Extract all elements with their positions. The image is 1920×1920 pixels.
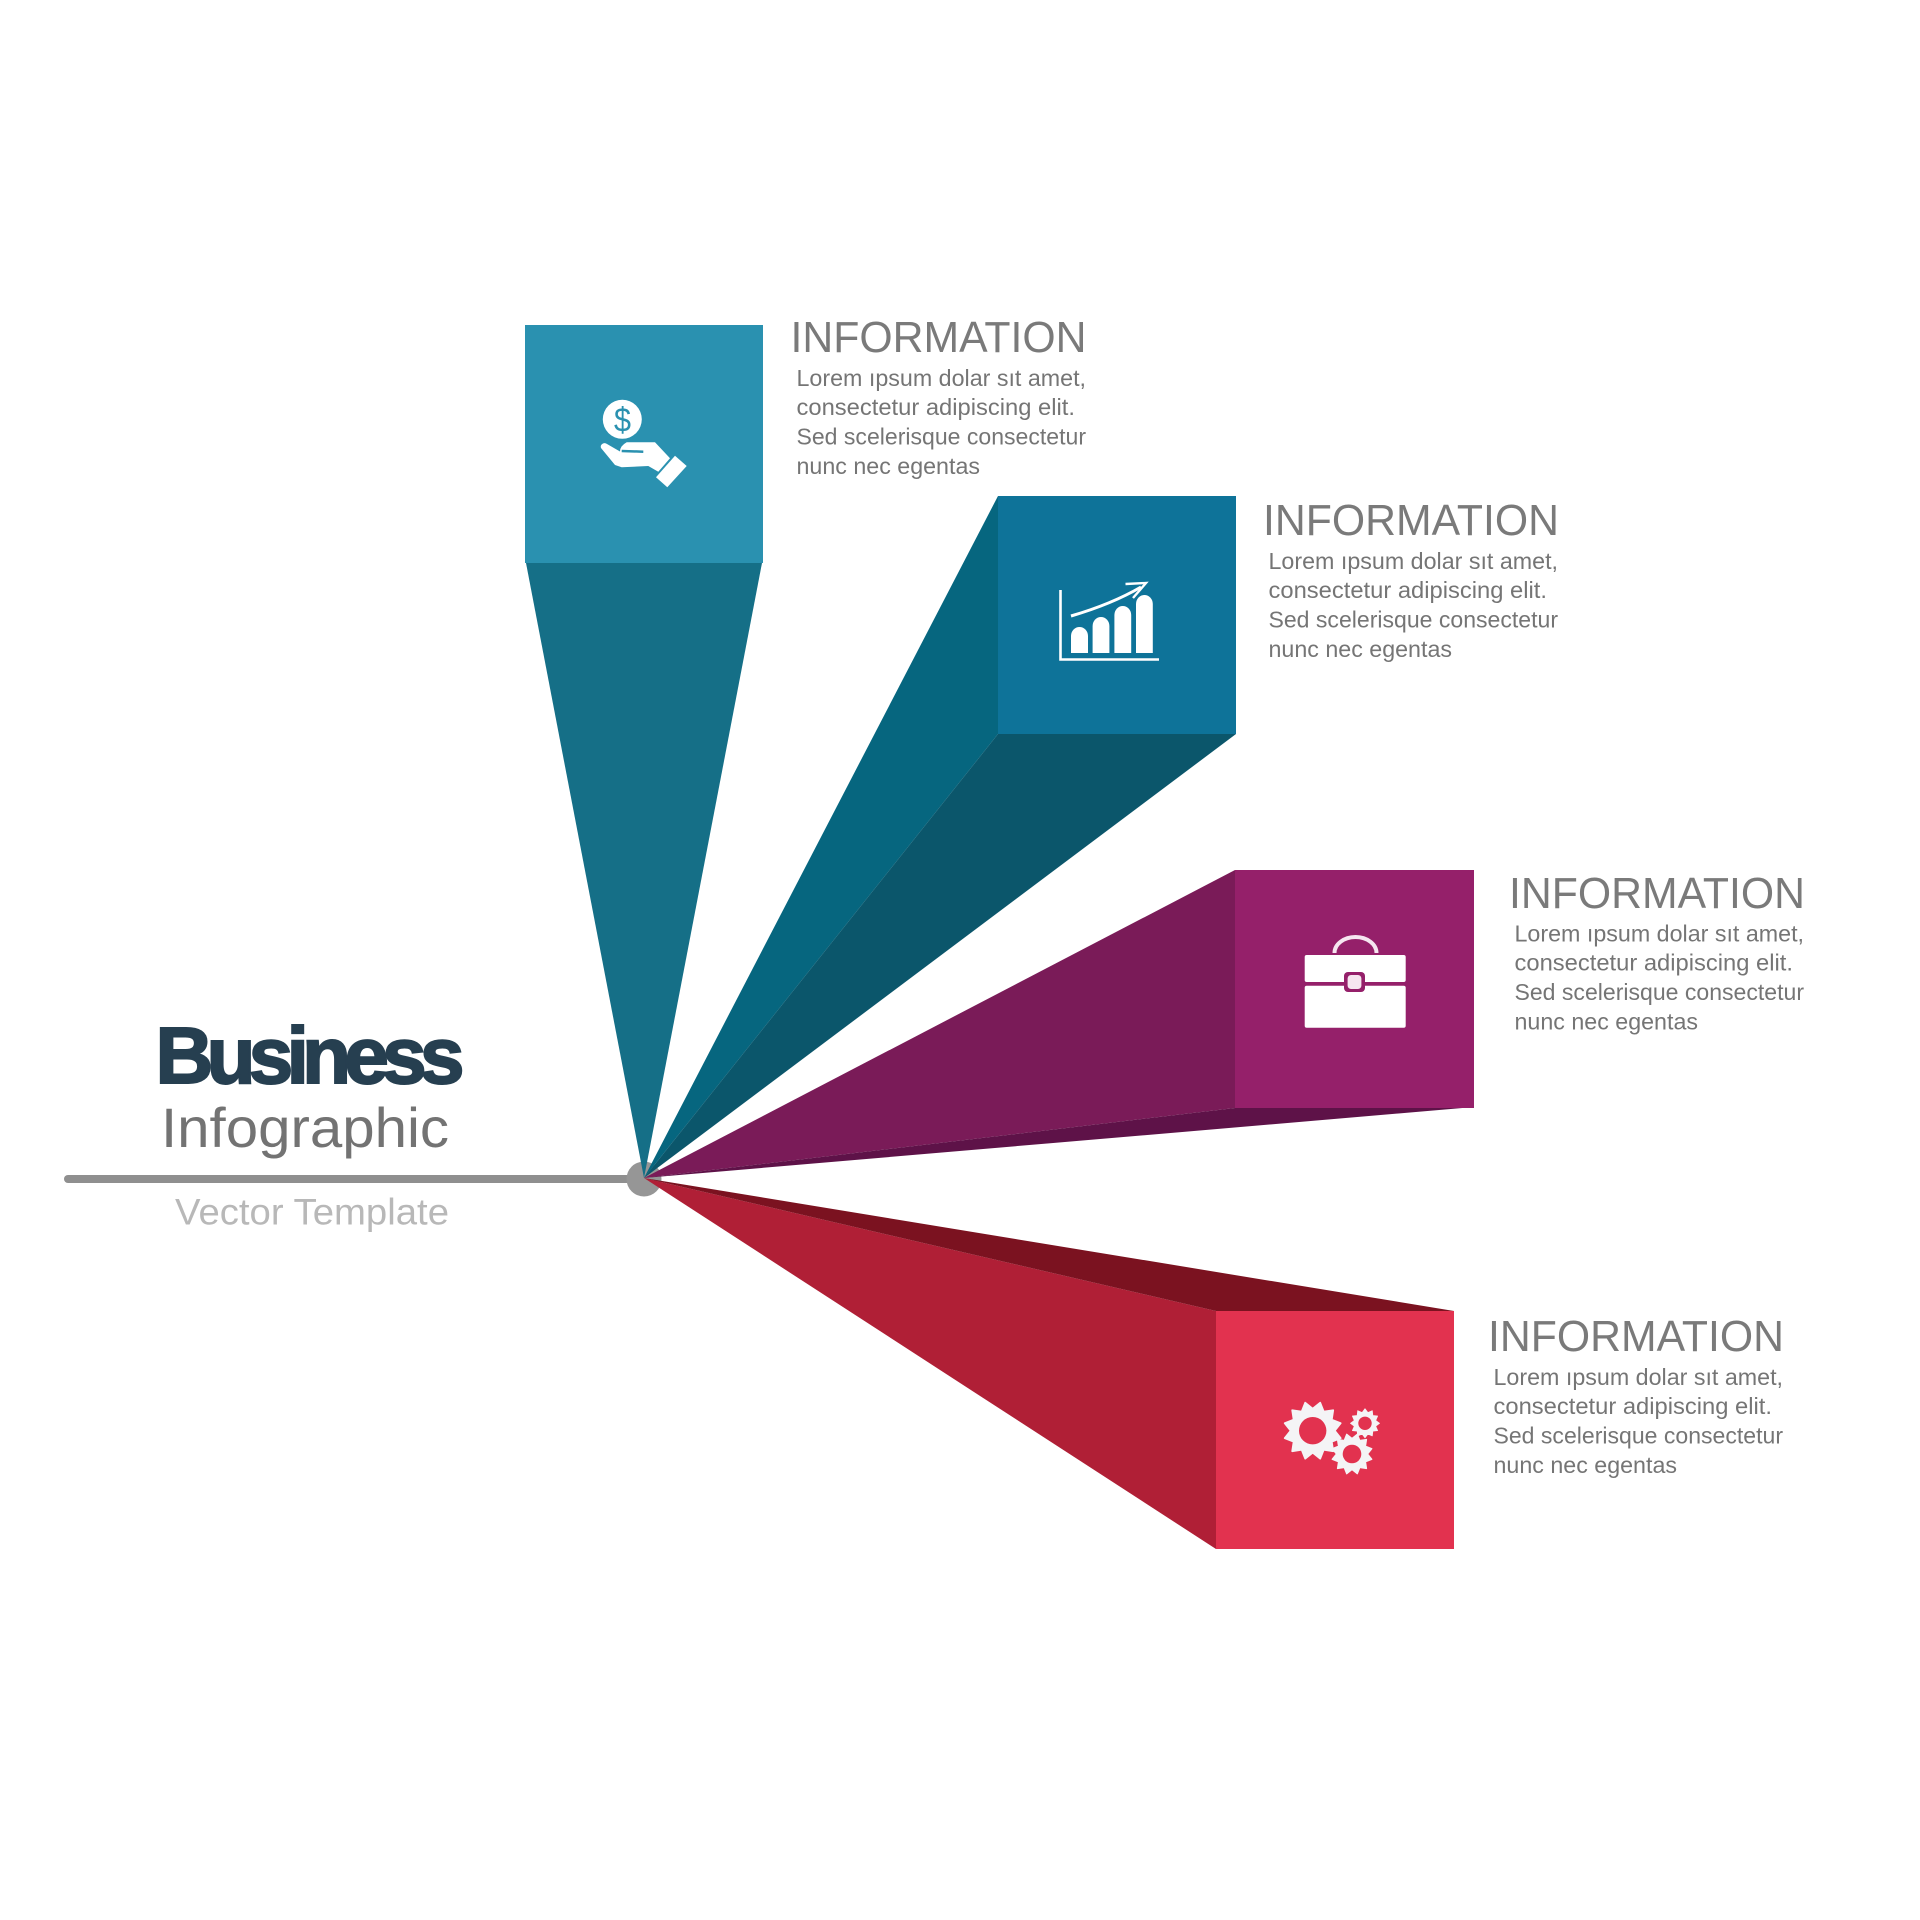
square: step 3	[1235, 870, 1474, 1108]
text block: step 3	[1509, 869, 1805, 1034]
column side face: step 3	[644, 870, 1235, 1178]
panel: step 2 blue column	[644, 496, 1236, 1178]
panel: step 3 purple column	[644, 870, 1474, 1178]
square: step 4	[1216, 1311, 1454, 1549]
body: step 4: Sed scelerisque consectetur	[1494, 1422, 1783, 1448]
body: step 4: Lorem ıpsum dolar sıt amet,	[1494, 1364, 1783, 1390]
body: step 2: nunc nec egentas	[1268, 636, 1452, 662]
column top face: step 4	[644, 1178, 1454, 1311]
subtitle: Infographic: Infographic	[161, 1096, 449, 1159]
icon: hand holding coin: $	[614, 402, 631, 440]
square: step 1	[525, 325, 763, 563]
icon: hand holding coin	[601, 400, 687, 487]
hub circle	[626, 1162, 662, 1196]
icon: growth chart	[1060, 583, 1159, 660]
heading: step 1: INFORMATION	[790, 313, 1086, 362]
column bottom face: step 2	[644, 734, 1236, 1178]
body: step 1: consectetur adipiscing elit.	[796, 394, 1075, 420]
icon: briefcase	[1305, 937, 1406, 1028]
body: step 2: Lorem ıpsum dolar sıt amet,	[1268, 548, 1558, 574]
heading: step 2: INFORMATION	[1263, 496, 1559, 545]
body: step 2: consectetur adipiscing elit.	[1268, 577, 1547, 603]
text block: step 2	[1263, 496, 1559, 662]
heading: step 3: INFORMATION	[1509, 869, 1805, 918]
panel: step 1 teal column	[525, 325, 763, 1178]
square: step 2	[998, 496, 1236, 734]
caption: Vector Template: Vector Template	[175, 1192, 449, 1232]
body: step 2: Sed scelerisque consectetur	[1268, 606, 1558, 632]
column face: step 1	[526, 563, 762, 1178]
panel: step 4 red column	[644, 1178, 1454, 1549]
axis line	[64, 1175, 644, 1183]
body: step 1: Sed scelerisque consectetur	[796, 424, 1086, 450]
column side face: step 4	[644, 1178, 1216, 1549]
body: step 1: nunc nec egentas	[796, 453, 980, 479]
column side face: step 2	[644, 496, 998, 1178]
body: step 3: nunc nec egentas	[1514, 1008, 1698, 1034]
title block	[156, 1011, 464, 1232]
text block: step 4	[1488, 1312, 1784, 1478]
icon: gears	[1277, 1395, 1380, 1479]
body: step 1	[796, 365, 1086, 479]
text block: step 1	[790, 313, 1086, 479]
heading: step 4: INFORMATION	[1488, 1312, 1784, 1361]
body: step 1: Lorem ıpsum dolar sıt amet,	[796, 365, 1086, 391]
title: Business: Business	[156, 1011, 464, 1100]
body: step 3	[1514, 920, 1804, 1034]
column bottom face: step 3	[644, 1107, 1474, 1178]
body: step 4	[1494, 1364, 1783, 1478]
body: step 4: nunc nec egentas	[1494, 1452, 1677, 1478]
body: step 3: Lorem ıpsum dolar sıt amet,	[1514, 920, 1804, 946]
body: step 2	[1268, 548, 1558, 662]
body: step 3: Sed scelerisque consectetur	[1514, 979, 1804, 1005]
body: step 3: consectetur adipiscing elit.	[1514, 950, 1793, 976]
body: step 4: consectetur adipiscing elit.	[1494, 1393, 1772, 1419]
